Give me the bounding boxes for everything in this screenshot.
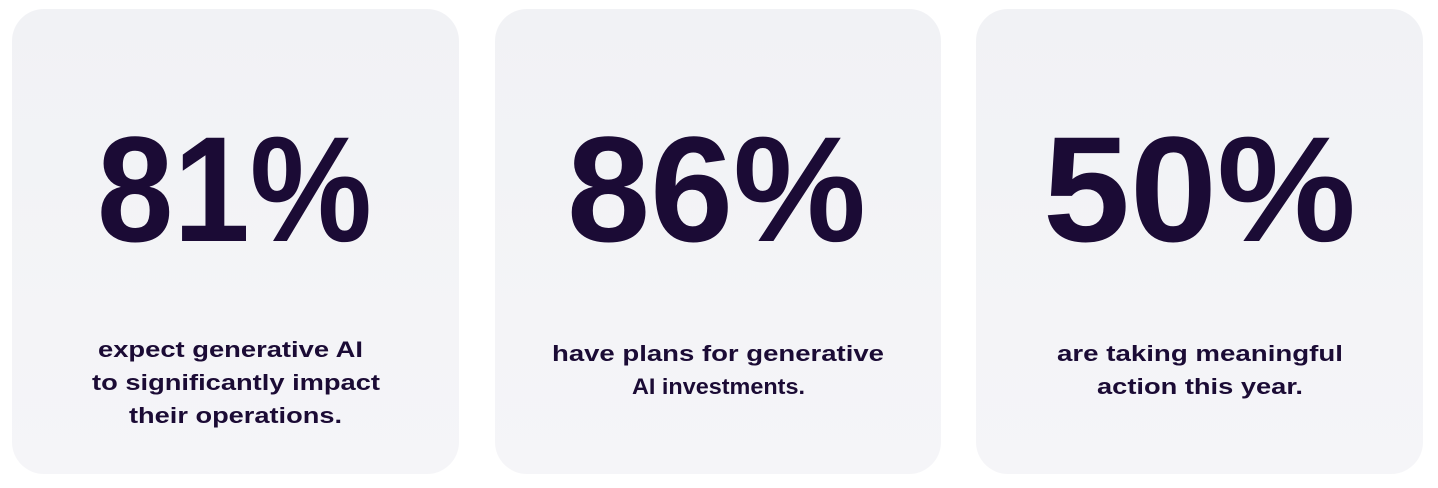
panel: card 1 — [12, 9, 459, 474]
caption card 1: expect generative AI — [98, 337, 363, 362]
caption card 1: to significantly impact — [92, 370, 381, 395]
caption card 1: their operations. — [129, 403, 342, 428]
big number 50%: 50% — [1043, 105, 1356, 273]
caption card 3: action this year. — [1097, 374, 1303, 399]
caption card 2 — [552, 341, 884, 399]
panel: card 3 — [976, 9, 1423, 474]
panel: card 2 — [495, 9, 941, 474]
big number 81%: 81% — [97, 105, 372, 273]
caption card 3: are taking meaningful — [1057, 341, 1343, 366]
caption card 2: have plans for generative — [552, 341, 884, 366]
caption card 1 — [92, 337, 381, 428]
big number 86%: 86% — [567, 105, 866, 273]
caption card 3 — [1057, 341, 1343, 399]
caption card 2: AI investments. — [632, 374, 805, 399]
